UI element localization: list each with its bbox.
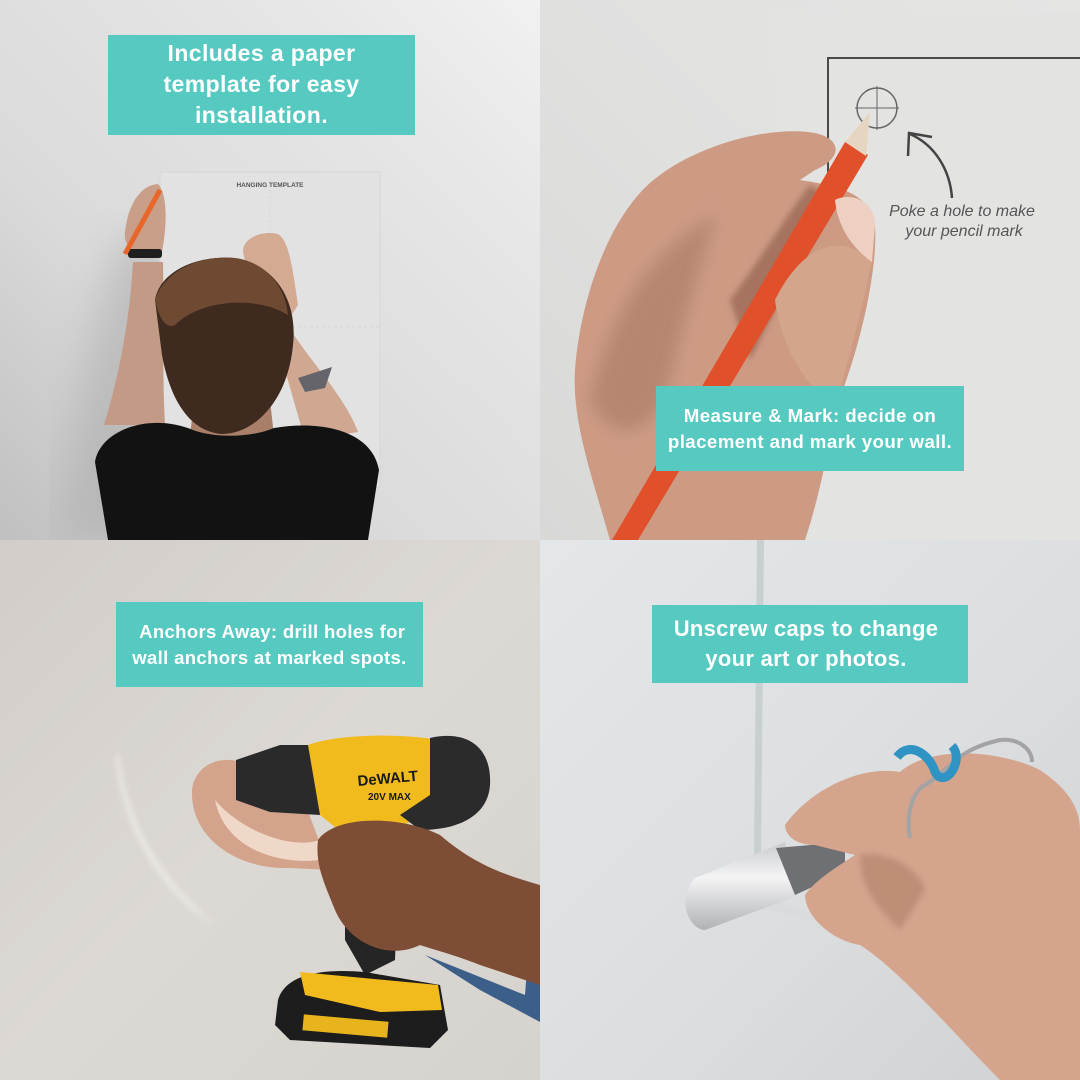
drill xyxy=(236,736,490,1048)
caption: anchors away xyxy=(116,602,423,687)
caption: paper template xyxy=(108,35,415,135)
icon: orange pencil xyxy=(125,190,160,254)
template with target: your pencil mark xyxy=(904,223,1024,240)
caption: unscrew caps: your art or photos. xyxy=(705,646,907,671)
caption: paper template: Includes a paper xyxy=(168,40,355,66)
acrylic sheet edge xyxy=(754,540,764,860)
caption: paper template: template for easy xyxy=(164,70,360,96)
template with target: Poke a hole to make xyxy=(889,203,1035,220)
paper template xyxy=(160,172,380,429)
caption: anchors away: wall anchors at marked spots. xyxy=(132,646,407,668)
paper template: HANGING TEMPLATE xyxy=(236,182,304,189)
caption: anchors away: Anchors Away: drill holes for xyxy=(139,621,405,642)
body shadow on wall xyxy=(64,237,160,540)
caption: measure and mark: Measure & Mark: decide on xyxy=(684,404,936,426)
panel: drilling xyxy=(0,540,540,1080)
drill: 20V MAX xyxy=(368,792,411,803)
caption: paper template: installation. xyxy=(195,102,328,128)
standoff xyxy=(685,842,845,930)
wall dent shadow xyxy=(116,759,198,912)
template with target xyxy=(827,57,1080,240)
hand with pencil xyxy=(575,112,875,540)
sleeve xyxy=(425,955,540,1022)
open hand xyxy=(192,760,330,870)
drill: DeWALT xyxy=(357,768,419,790)
person from behind xyxy=(95,184,379,540)
panel: measure and mark xyxy=(540,0,1080,540)
hand xyxy=(785,753,1080,1080)
panel: caps xyxy=(540,540,1080,1080)
ring xyxy=(897,740,1032,838)
caption: measure and mark: placement and mark your wall. xyxy=(668,430,952,452)
caption: unscrew caps: Unscrew caps to change xyxy=(674,616,938,641)
panel: template on wall xyxy=(0,0,540,540)
caption: measure and mark xyxy=(656,386,964,471)
caption: unscrew caps xyxy=(652,605,968,683)
gripping hand xyxy=(317,821,540,985)
